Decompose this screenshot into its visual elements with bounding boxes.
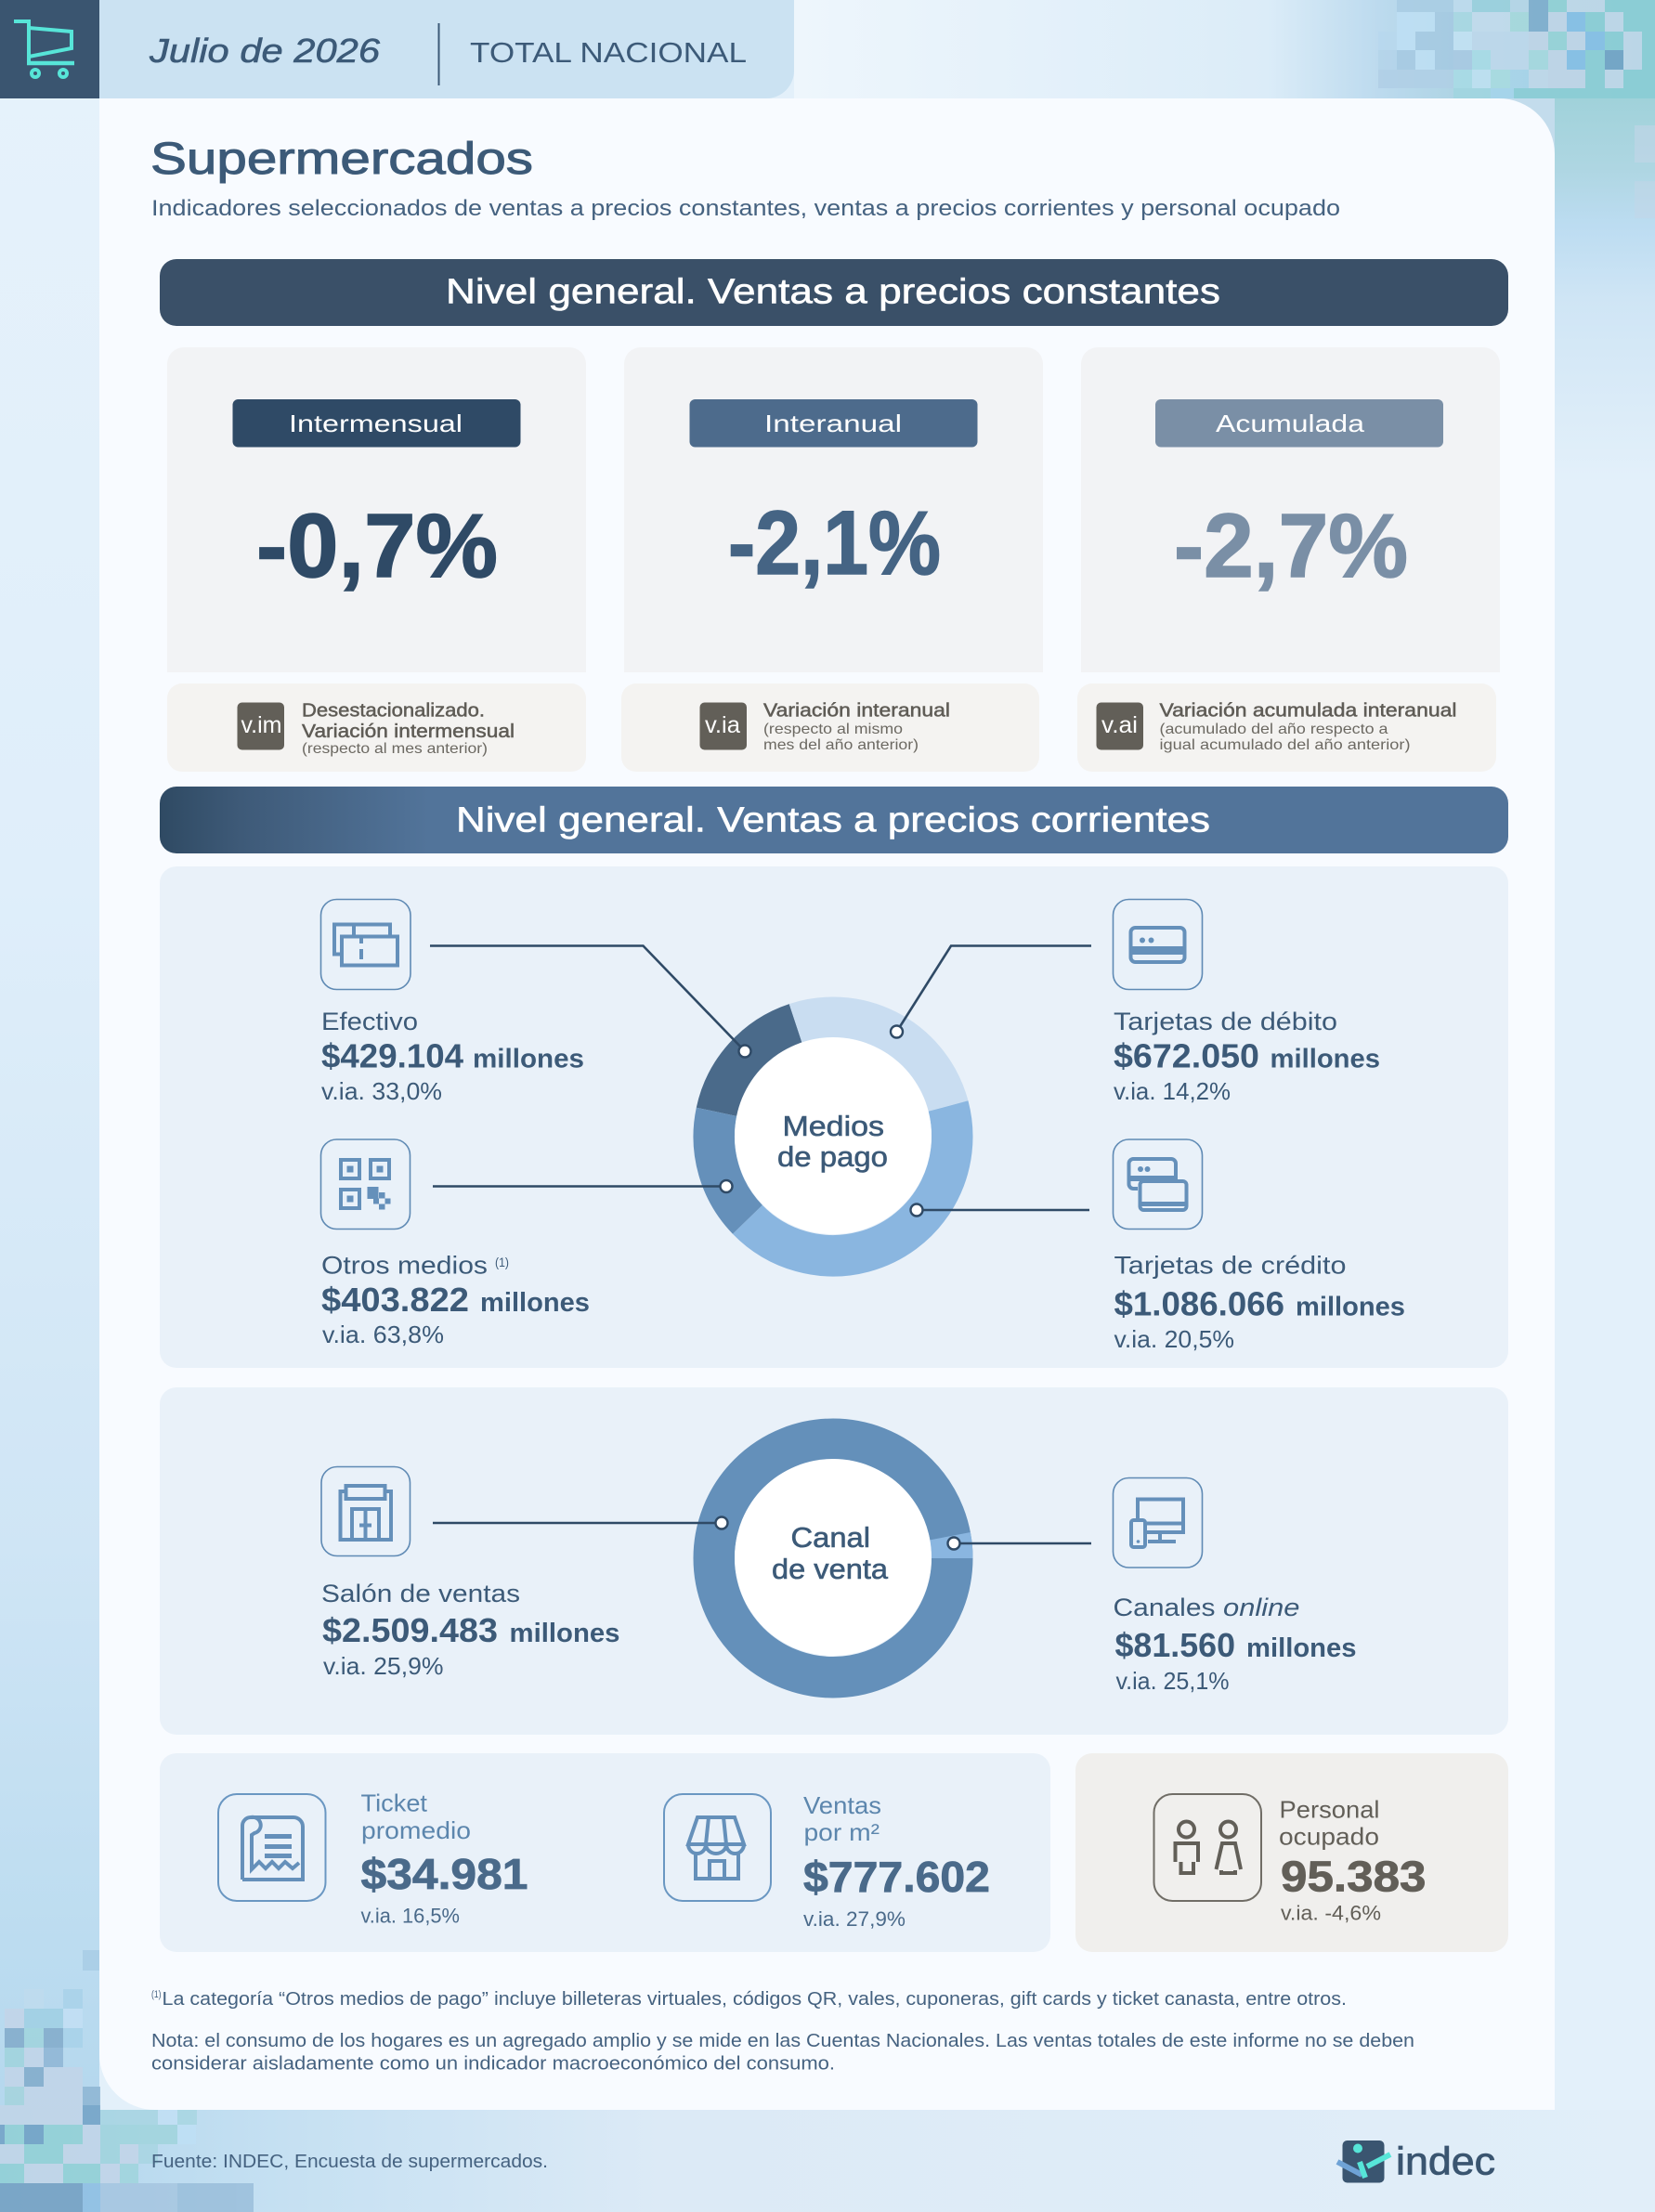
- indicator: ticket promedio: $34.981: [360, 1850, 528, 1898]
- indicator: ventas por m2: por m²: [804, 1818, 880, 1846]
- callout: salon de ventas: [321, 1467, 728, 1680]
- callout: tarjetas de credito: $1.086.066: [1114, 1285, 1284, 1322]
- donut chart: canal de venta: [694, 1419, 972, 1698]
- callout: tarjetas de debito: millones: [1271, 1044, 1380, 1073]
- callout: salon de ventas: $2.509.483: [322, 1611, 498, 1649]
- callout: canales online: online: [1223, 1594, 1300, 1621]
- indicator: ventas por m2: $777.602: [803, 1853, 990, 1901]
- indicator: ticket promedio: [218, 1789, 528, 1928]
- caption: v.im: [167, 683, 586, 772]
- callout: otros medios: (1): [495, 1255, 509, 1269]
- donut center label: de venta: [772, 1553, 889, 1585]
- callout: efectivo: $429.104: [321, 1036, 463, 1075]
- value: acumulada: -2,7%: [1174, 495, 1408, 596]
- caption: v.im: Desestacionalizado.: [302, 700, 485, 721]
- callout: otros medios: millones: [480, 1288, 590, 1318]
- caption: v.im: (respecto al mes anterior): [302, 741, 488, 757]
- panel: ticket y ventas por m2: [160, 1753, 1050, 1952]
- donut center label: Medios: [782, 1110, 884, 1142]
- date label: Julio de 2026: [149, 32, 381, 70]
- callout: tarjetas de debito: $672.050: [1114, 1036, 1259, 1075]
- coverage label: TOTAL NACIONAL: [470, 36, 747, 69]
- value: intermensual: -0,7%: [256, 495, 498, 596]
- panel: personal ocupado: v.ia. -4,6%: [1281, 1902, 1381, 1924]
- footnote: La categoría “Otros medios de pago” incluye billeteras virtuales, códigos QR, vales, cuponeras, gift cards y ticket canasta, entre otros.: [162, 1989, 1347, 2010]
- callout: efectivo: [321, 899, 750, 1105]
- callout: salon de ventas: Salón de ventas: [321, 1580, 520, 1607]
- callout: tarjetas de debito: [891, 899, 1380, 1105]
- panel: personal ocupado: ocupado: [1279, 1822, 1379, 1850]
- callout: otros medios: $403.822: [321, 1281, 469, 1319]
- panel: canal de venta: [160, 1387, 1508, 1735]
- panel: personal ocupado: 95.383: [1281, 1852, 1427, 1900]
- callout: otros medios: Otros medios: [321, 1252, 488, 1280]
- caption: v.ia: v.ia: [705, 712, 740, 738]
- panel: personal ocupado: [1075, 1753, 1508, 1952]
- donut center label: [772, 1521, 889, 1585]
- heading bar: precios corrientes: Nivel general. Ventas a precios corrientes: [456, 800, 1210, 839]
- donut center label: Canal: [791, 1521, 870, 1554]
- panel: medios de pago: [160, 866, 1508, 1368]
- white main panel: [99, 98, 1555, 2110]
- callout: salon de ventas: millones: [509, 1619, 620, 1648]
- callout: tarjetas de debito: Tarjetas de débito: [1114, 1008, 1337, 1035]
- callout: canales online: $81.560: [1114, 1626, 1235, 1664]
- title: Supermercados: [150, 135, 533, 184]
- callout: salon de ventas: v.ia. 25,9%: [323, 1652, 444, 1680]
- caption: v.ai: (acumulado del año respecto a: [1159, 722, 1388, 737]
- logo: indec: indec: [1396, 2140, 1495, 2182]
- callout: efectivo: millones: [473, 1044, 584, 1073]
- panel: acumulada: [1081, 347, 1500, 672]
- donut chart: medios de pago: [665, 969, 1001, 1305]
- source: Fuente: INDEC, Encuesta de supermercados.: [151, 2152, 548, 2172]
- caption: v.ai: igual acumulado del año anterior): [1159, 737, 1410, 753]
- callout: tarjetas de credito: Tarjetas de crédito: [1114, 1252, 1347, 1280]
- note: considerar aisladamente como un indicador macroeconómico del consumo.: [151, 2054, 835, 2075]
- caption: v.im: Variación intermensual: [302, 722, 515, 742]
- panel: acumulada: Acumulada: [1216, 410, 1365, 437]
- indicator: ventas por m2: [664, 1791, 990, 1931]
- caption: v.ai: [1077, 683, 1496, 772]
- callout: efectivo: v.ia. 33,0%: [321, 1077, 442, 1105]
- indicator: ticket promedio: v.ia. 16,5%: [360, 1904, 460, 1928]
- callout: tarjetas de credito: v.ia. 20,5%: [1114, 1325, 1234, 1353]
- decorative pixel mosaic bottom left: [0, 1950, 254, 2212]
- indicator: ticket promedio: promedio: [361, 1816, 471, 1844]
- footnote: (1): [151, 1989, 162, 2000]
- donut center label: [777, 1110, 888, 1173]
- callout: canales online: millones: [1246, 1633, 1356, 1663]
- caption: v.ia: [621, 683, 1039, 772]
- caption: v.ai: Variación acumulada interanual: [1159, 700, 1456, 721]
- callout: efectivo: Efectivo: [321, 1008, 418, 1035]
- caption: v.ia: (respecto al mismo: [763, 722, 903, 737]
- logo: indec: [1337, 2140, 1495, 2182]
- subtitle: Indicadores seleccionados de ventas a precios constantes, ventas a precios corrientes y personal ocupado: [151, 196, 1340, 221]
- decorative pixel mosaic top right: [1378, 0, 1655, 98]
- panel: intermensual: Intermensual: [289, 410, 463, 437]
- callout: tarjetas de credito: [910, 1139, 1405, 1353]
- callout: canales online: [947, 1478, 1356, 1695]
- icon: shopping cart: [14, 21, 74, 77]
- heading bar: precios corrientes: [160, 787, 1508, 853]
- callout: canales online: v.ia. 25,1%: [1116, 1667, 1230, 1695]
- caption: v.ia: Variación interanual: [763, 700, 950, 721]
- heading bar: precios constantes: [160, 259, 1508, 326]
- callout: canales online: Canales: [1113, 1594, 1215, 1621]
- callout: tarjetas de credito: millones: [1296, 1293, 1405, 1322]
- icon: people: [1176, 1822, 1241, 1873]
- indicator: ticket promedio: Ticket: [360, 1789, 428, 1816]
- caption: v.ia: mes del año anterior): [763, 737, 919, 753]
- panel: intermensual: [167, 347, 586, 672]
- panel: interanual: Interanual: [764, 410, 902, 437]
- donut center label: de pago: [777, 1140, 888, 1173]
- panel: personal ocupado: Personal: [1280, 1796, 1380, 1824]
- caption: v.ai: v.ai: [1101, 712, 1138, 738]
- heading bar: precios constantes: Nivel general. Ventas a precios constantes: [446, 273, 1220, 312]
- callout: otros medios: [321, 1139, 732, 1348]
- header band: [0, 0, 794, 98]
- value: interanual: -2,1%: [728, 492, 941, 593]
- callout: tarjetas de debito: v.ia. 14,2%: [1114, 1077, 1231, 1105]
- indicator: ventas por m2: Ventas: [803, 1791, 881, 1819]
- panel: interanual: [624, 347, 1043, 672]
- note: Nota: el consumo de los hogares es un agregado amplio y se mide en las Cuentas Nacionales. Las ventas totales de este informe no se deben: [151, 2031, 1414, 2051]
- caption: v.im: v.im: [241, 712, 282, 738]
- note: [151, 2031, 1414, 2075]
- callout: otros medios: v.ia. 63,8%: [322, 1321, 444, 1348]
- indicator: ventas por m2: v.ia. 27,9%: [803, 1907, 906, 1931]
